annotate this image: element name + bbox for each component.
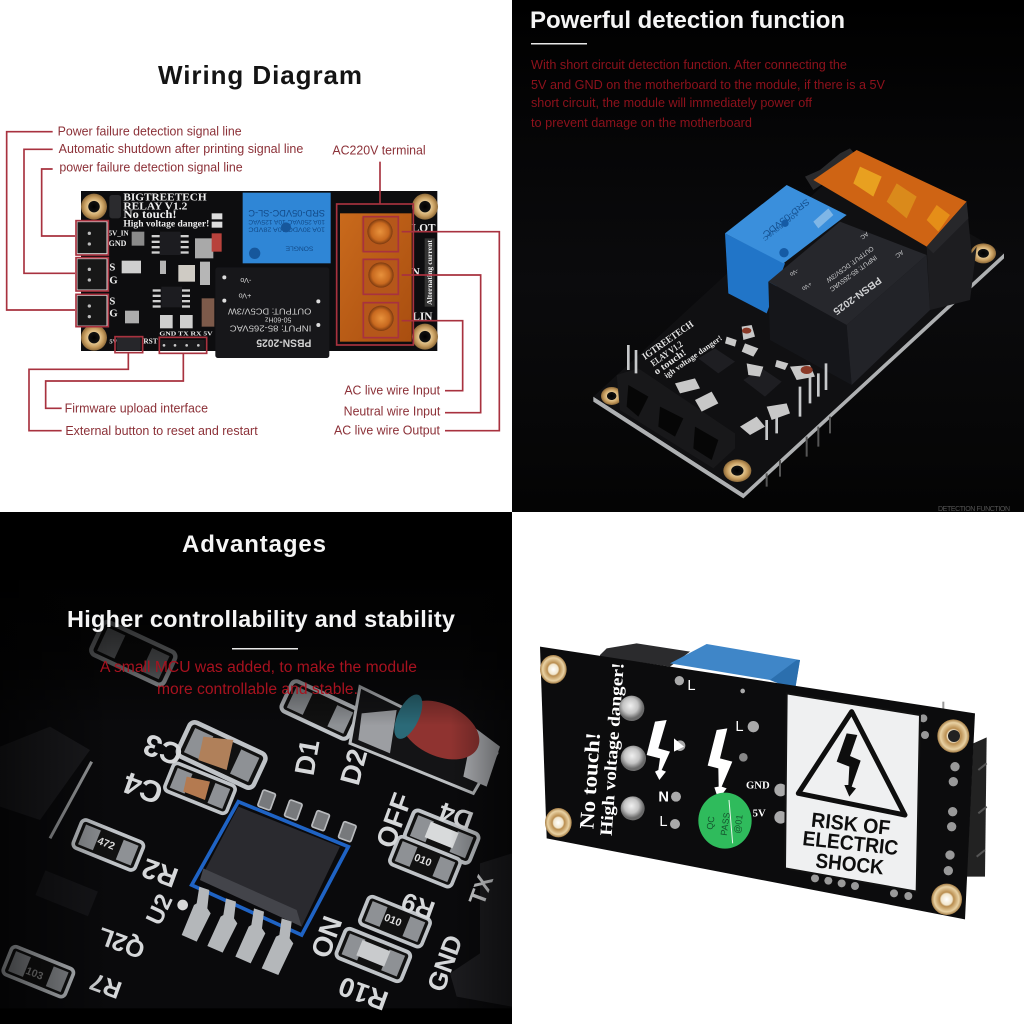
terminal labels: Alternating current bbox=[425, 239, 434, 305]
pin letters bbox=[658, 678, 770, 830]
wiring labels: Power failure detection signal line bbox=[58, 124, 242, 138]
wiring labels bbox=[58, 124, 441, 438]
blue relay: 10A 30VDC 10A 28VDC bbox=[248, 225, 325, 231]
warning text: High voltage danger! bbox=[597, 662, 628, 836]
QC pass sticker: QC bbox=[705, 815, 717, 830]
panel: powerful detection function bbox=[512, 0, 1024, 513]
silkscreen labels: D1 bbox=[289, 737, 325, 778]
black power module bbox=[215, 267, 329, 358]
pin letters: N bbox=[658, 790, 669, 806]
board silkscreen text: RST bbox=[143, 336, 158, 345]
capacitors and resistors: 103 bbox=[24, 965, 45, 983]
blue relay: SRD-05VDC bbox=[761, 197, 812, 240]
side connectors bbox=[967, 737, 987, 877]
terminal labels bbox=[412, 222, 436, 323]
QC pass sticker: PASS bbox=[719, 812, 732, 836]
red description: to prevent damage on the motherboard bbox=[531, 116, 752, 130]
subheading: Higher controllability and stability bbox=[67, 606, 455, 632]
silkscreen labels: D4 bbox=[435, 796, 477, 836]
QC pass sticker bbox=[698, 793, 752, 849]
pin letters: L bbox=[687, 678, 695, 694]
terminal labels: LIN bbox=[412, 311, 433, 323]
panel: advantages bbox=[0, 512, 512, 1024]
dark photo vignette bbox=[0, 580, 512, 1008]
relay and connector behind board bbox=[600, 643, 943, 713]
risk of electric shock sign bbox=[785, 693, 920, 892]
pin letters: 5V bbox=[753, 809, 766, 820]
chips, diodes and silkscreen: IGTREETECH bbox=[640, 319, 696, 362]
wiring labels: AC live wire Input bbox=[344, 384, 440, 398]
lightning bolt icons bbox=[647, 720, 732, 799]
blue relay: 10A 250VAC 10A 125VAC bbox=[248, 218, 325, 224]
silkscreen labels: R2 bbox=[138, 852, 182, 893]
terminal labels: N bbox=[412, 266, 421, 278]
chips, diodes and silkscreen: ELAY V1.2 bbox=[649, 340, 685, 369]
diode bbox=[350, 687, 500, 793]
wiring labels: AC live wire Output bbox=[334, 424, 440, 438]
mounting holes bbox=[540, 655, 969, 915]
black power module: -Vo bbox=[240, 276, 251, 285]
red description: A small MCU was added, to make the module bbox=[100, 659, 417, 676]
chips, diodes and silkscreen: o touch! bbox=[652, 347, 688, 377]
board silkscreen text: High voltage danger! bbox=[123, 220, 209, 230]
panel: wiring diagram bbox=[7, 60, 499, 438]
silkscreen labels: GND bbox=[421, 931, 469, 995]
pcb base bbox=[593, 163, 1004, 498]
red description: 5V and GND on the motherboard to the module, if there is a 5V bbox=[531, 78, 886, 92]
chips, diodes and silkscreen: igh voltage danger! bbox=[663, 333, 724, 380]
connectors and pins bbox=[617, 345, 826, 468]
board silkscreen text: No touch! bbox=[123, 208, 177, 221]
board silkscreen text: G bbox=[109, 309, 118, 320]
wiring labels: Firmware upload interface bbox=[65, 402, 208, 416]
sign text: RISK OF bbox=[810, 809, 891, 840]
silkscreen labels: C4 bbox=[119, 765, 167, 810]
sign text bbox=[801, 809, 899, 879]
board silkscreen text: S bbox=[109, 263, 115, 274]
silkscreen labels: R7 bbox=[87, 967, 125, 1003]
board silkscreen text: S bbox=[109, 297, 115, 308]
blue relay: 10A 250VAC bbox=[761, 210, 799, 241]
silkscreen labels: OFF bbox=[370, 789, 418, 852]
capacitors and resistors: 010 bbox=[382, 912, 403, 929]
pin letters: L bbox=[659, 814, 667, 830]
sign text: SHOCK bbox=[814, 849, 885, 879]
black power module: PBSN-2025 bbox=[256, 337, 311, 349]
panel: board back side bbox=[540, 643, 987, 919]
black power module: AC bbox=[893, 248, 904, 259]
pin letters: GND bbox=[746, 780, 770, 791]
QC pass sticker: @01 bbox=[732, 814, 745, 834]
silkscreen labels: R9 bbox=[397, 886, 439, 926]
relay board perspective bbox=[593, 148, 1004, 498]
circuit board bbox=[77, 191, 438, 358]
red description: short circuit, the module will immediately power off bbox=[531, 96, 813, 110]
heading: Powerful detection function bbox=[530, 7, 845, 34]
title: Wiring Diagram: Wiring Diagram bbox=[158, 60, 362, 90]
pcb back bbox=[540, 647, 975, 919]
black power module: +Vo bbox=[238, 292, 251, 301]
wiring labels: Automatic shutdown after printing signal line bbox=[59, 142, 303, 156]
silkscreen labels bbox=[87, 727, 498, 1017]
mounting holes bbox=[81, 194, 438, 351]
silkscreen labels: R10 bbox=[334, 971, 392, 1017]
red description bbox=[531, 58, 886, 130]
black power module: +Vo bbox=[800, 280, 812, 291]
board silkscreen text: 5V_IN bbox=[109, 228, 129, 237]
terminal labels: LOT bbox=[412, 222, 436, 234]
black power module: OUTPUT: DC5V/3W bbox=[824, 244, 875, 284]
black power module: -Vo bbox=[788, 267, 799, 277]
black power module: INPUT: 85-265VAC bbox=[828, 253, 878, 292]
pin letters: L bbox=[735, 719, 743, 735]
heading: Advantages: Advantages bbox=[182, 531, 326, 558]
sign text: ELECTRIC bbox=[801, 827, 899, 860]
warning text: No touch! bbox=[576, 732, 605, 830]
board silkscreen text: RELAY V1.2 bbox=[123, 201, 187, 212]
board silkscreen text: G bbox=[109, 275, 118, 286]
silkscreen labels: D2 bbox=[334, 746, 373, 788]
black power module: OUTPUT: DC5V/3W bbox=[227, 306, 311, 315]
blue relay: SRD-05VDC-SL-C bbox=[248, 208, 325, 218]
blue relay bbox=[243, 193, 331, 263]
blue relay: SONGLE bbox=[285, 245, 313, 252]
silkscreen labels: TX bbox=[464, 871, 498, 908]
silkscreen labels: C3 bbox=[139, 727, 187, 772]
orange terminal block bbox=[805, 148, 977, 310]
red description: With short circuit detection function. After connecting the bbox=[531, 58, 847, 72]
white connectors bbox=[77, 221, 107, 326]
warning text bbox=[576, 662, 628, 836]
capacitors and resistors: 472 bbox=[96, 835, 117, 853]
orange terminal block bbox=[340, 213, 412, 342]
wiring labels: External button to reset and restart bbox=[65, 424, 258, 438]
black power module: PBSN-2025 bbox=[830, 274, 883, 317]
warning triangle bbox=[798, 712, 905, 815]
board silkscreen text: GND TX RX 5V bbox=[159, 330, 213, 337]
small caption: DETECTION FUNCTION bbox=[938, 506, 1010, 513]
black power module: AC bbox=[858, 230, 869, 240]
callout boxes and leader lines bbox=[7, 132, 499, 431]
silkscreen labels: U2 bbox=[141, 890, 178, 929]
silkscreen labels: ON bbox=[305, 912, 348, 962]
wiring labels: power failure detection signal line bbox=[59, 161, 243, 175]
solder pads bbox=[619, 676, 960, 900]
control chips and small parts bbox=[109, 195, 222, 328]
macro photo of circuit board bbox=[0, 580, 512, 1017]
board silkscreen text: GND bbox=[109, 239, 127, 248]
wiring diagram drawing bbox=[7, 124, 499, 438]
black power module bbox=[768, 222, 930, 385]
capacitors and resistors bbox=[0, 620, 512, 1007]
black power module: INPUT: 85-265VAC bbox=[229, 323, 311, 332]
chips, diodes and silkscreen bbox=[640, 319, 815, 435]
board silkscreen text bbox=[109, 193, 213, 345]
board silkscreen text: BIGTREETECH bbox=[123, 193, 207, 204]
header pins bbox=[117, 337, 205, 351]
silkscreen labels: Q2L bbox=[94, 921, 149, 963]
capacitors and resistors: 010 bbox=[412, 852, 433, 869]
black power module: 50-60Hz bbox=[264, 315, 291, 322]
red description bbox=[100, 659, 417, 698]
wiring labels: AC220V terminal bbox=[332, 144, 426, 158]
chip with blue traces bbox=[177, 790, 357, 975]
wiring labels: Neutral wire Input bbox=[344, 405, 441, 419]
blue relay bbox=[725, 185, 847, 313]
board silkscreen text: 5V bbox=[109, 338, 118, 345]
red description: more controllable and stable. bbox=[157, 681, 358, 698]
